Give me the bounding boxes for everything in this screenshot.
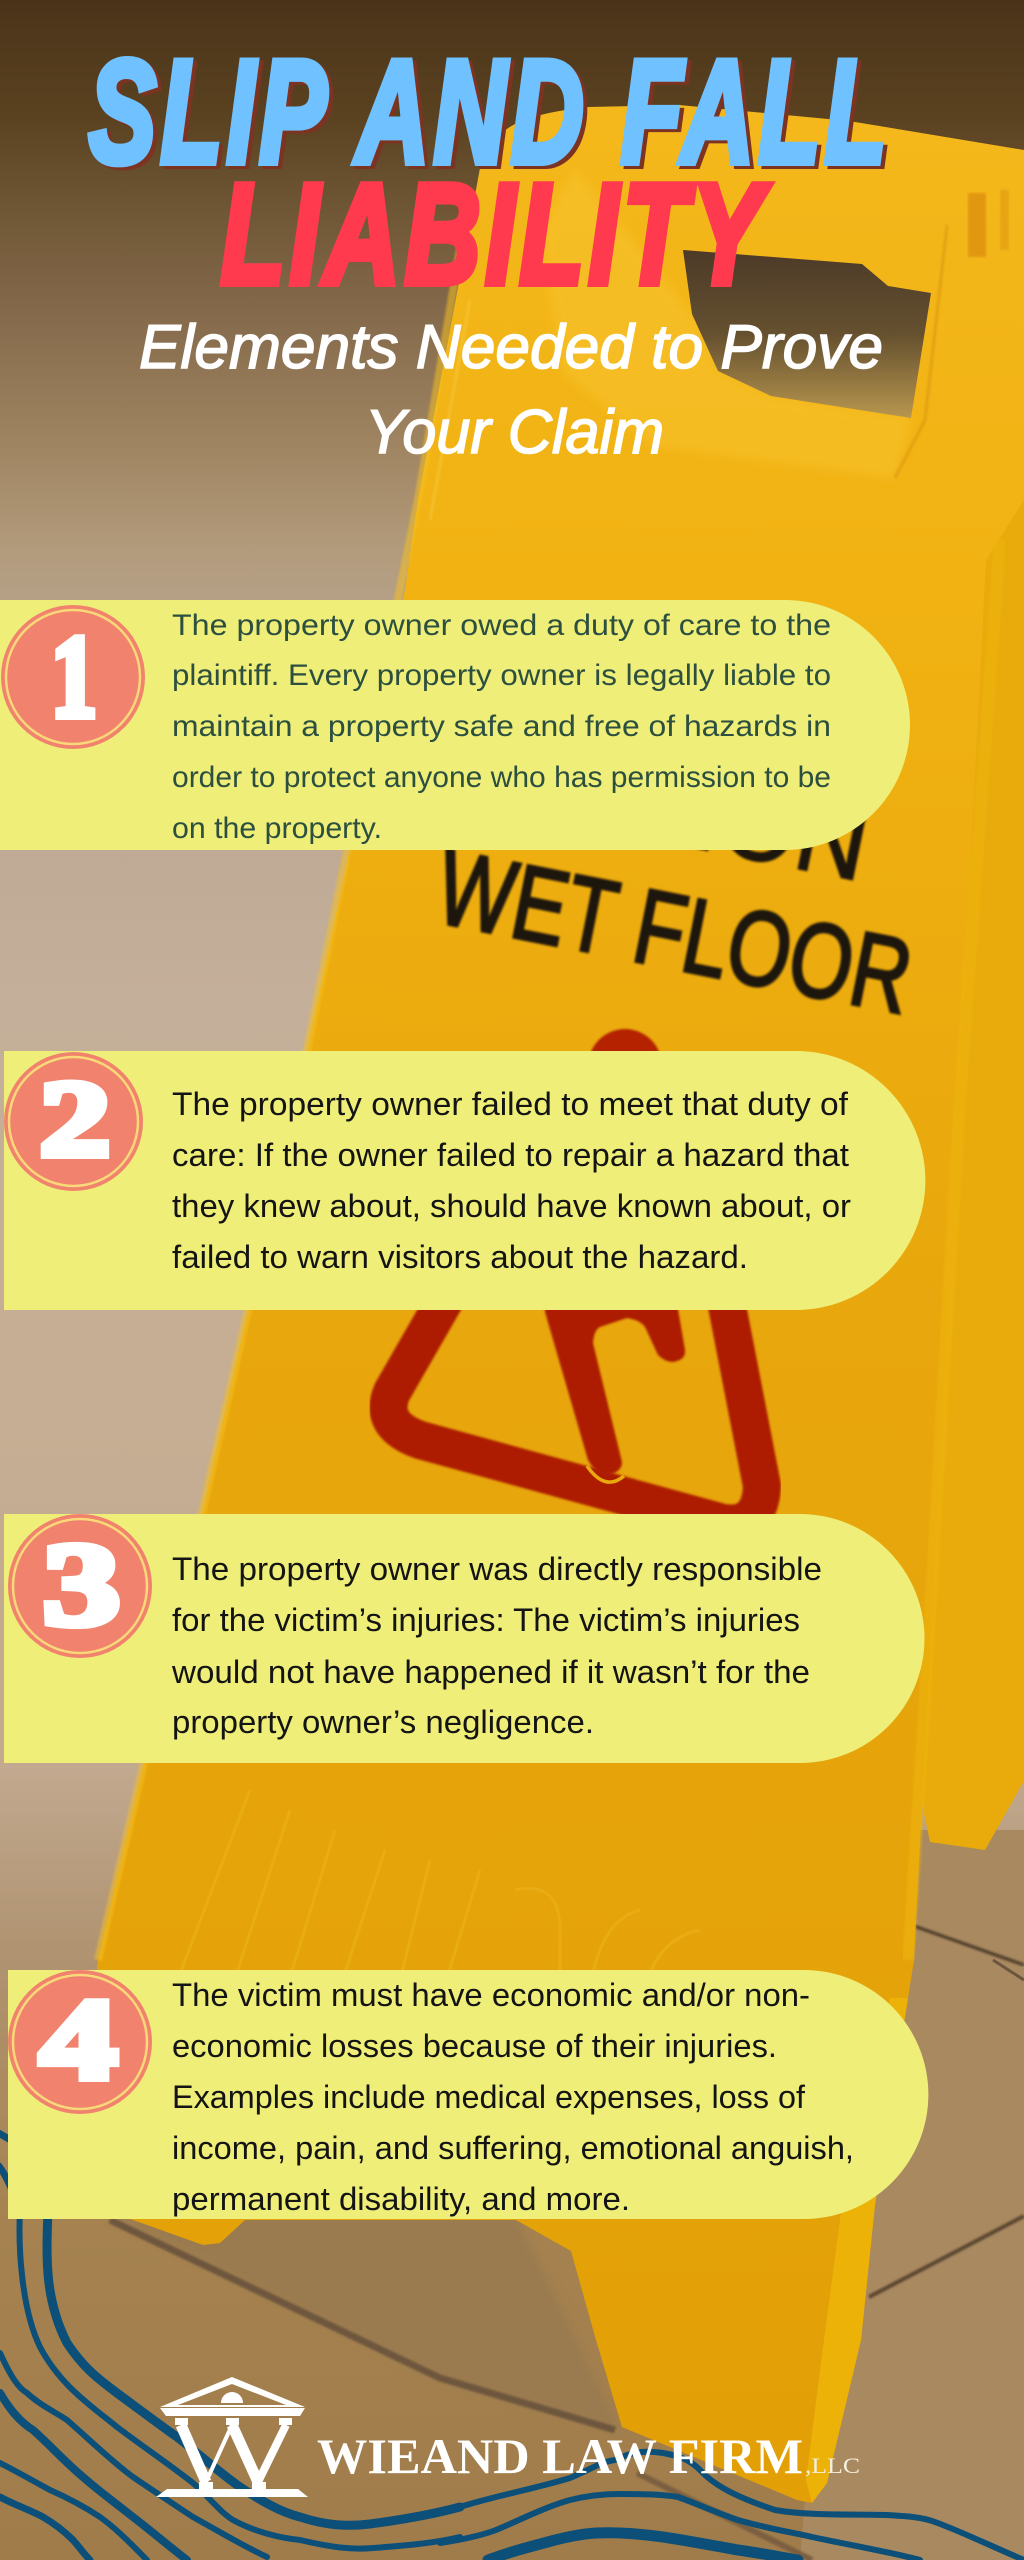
panel 3 text bbox=[171, 1551, 822, 1740]
sign rear panel bbox=[900, 150, 1024, 1850]
subtitle: Your Claim bbox=[365, 398, 664, 467]
badge 1 bbox=[1, 605, 145, 749]
panel 1 text: plaintiff. Every property owner is legally liable to bbox=[172, 659, 831, 692]
badge 2: 2 bbox=[40, 1060, 110, 1179]
logo suffix: ,LLC bbox=[805, 2453, 860, 2478]
panel 3 text: would not have happened if it wasn’t for the bbox=[171, 1654, 810, 1690]
panel 2 text: they knew about, should have known about, or bbox=[172, 1188, 851, 1224]
panel 1 text bbox=[172, 609, 831, 845]
badge 4 bbox=[8, 1970, 152, 2114]
panel 3: causation bbox=[4, 1514, 924, 1763]
subtitle: Elements Needed to Prove bbox=[139, 313, 883, 382]
logo: Wieand Law Firm bbox=[156, 2377, 860, 2497]
handle opening bbox=[683, 250, 931, 418]
badge 2 bbox=[4, 1052, 143, 1191]
panel 4 text: The victim must have economic and/or non- bbox=[172, 1977, 810, 2013]
panel 2: breach of duty bbox=[4, 1051, 925, 1310]
handle notches bbox=[968, 193, 986, 257]
badge 3: 3 bbox=[43, 1519, 120, 1650]
panel 1: duty of care bbox=[0, 600, 910, 850]
panel 4 text: permanent disability, and more. bbox=[172, 2181, 630, 2217]
sign text: caution: CAUTION bbox=[424, 702, 879, 904]
decorative blue waves bbox=[0, 2132, 1024, 2560]
icon: courthouse W bbox=[156, 2377, 308, 2497]
panel 3 text: for the victim’s injuries: The victim’s injuries bbox=[172, 1602, 800, 1638]
subtitle bbox=[139, 313, 883, 467]
panel 2 text: failed to warn visitors about the hazard. bbox=[172, 1239, 748, 1275]
panel 4 text bbox=[172, 1977, 854, 2217]
panel 2 text: The property owner failed to meet that duty of bbox=[172, 1086, 849, 1122]
title: liability: LIABILITY bbox=[221, 155, 770, 314]
badge 3 bbox=[8, 1514, 152, 1658]
handle rim shading bbox=[540, 170, 911, 478]
panel 1 text: maintain a property safe and free of hazards in bbox=[172, 710, 831, 743]
panel 1 text: on the property. bbox=[172, 812, 382, 845]
panel 3 text: property owner’s negligence. bbox=[172, 1704, 594, 1740]
panel 1 text: order to protect anyone who has permission to be bbox=[172, 761, 831, 794]
panel 4: damages bbox=[8, 1970, 928, 2219]
logo wordmark: WIEAND LAW FIRM bbox=[317, 2428, 803, 2484]
badge 4: 4 bbox=[40, 1976, 117, 2103]
hazard symbol bbox=[388, 1029, 762, 1524]
panel 2 text bbox=[172, 1086, 851, 1275]
panel 2 text: care: If the owner failed to repair a hazard that bbox=[172, 1137, 849, 1173]
panel 4 text: income, pain, and suffering, emotional anguish, bbox=[172, 2130, 854, 2166]
panel 3 text: The property owner was directly responsible bbox=[172, 1551, 822, 1587]
badge 1: 1 bbox=[51, 611, 97, 742]
panel 4 text: Examples include medical expenses, loss of bbox=[172, 2079, 806, 2115]
panel 1 text: The property owner owed a duty of care to the bbox=[172, 609, 831, 642]
sign bottom ribs bbox=[170, 1790, 700, 2100]
panel 4 text: economic losses because of their injuries. bbox=[172, 2028, 777, 2064]
